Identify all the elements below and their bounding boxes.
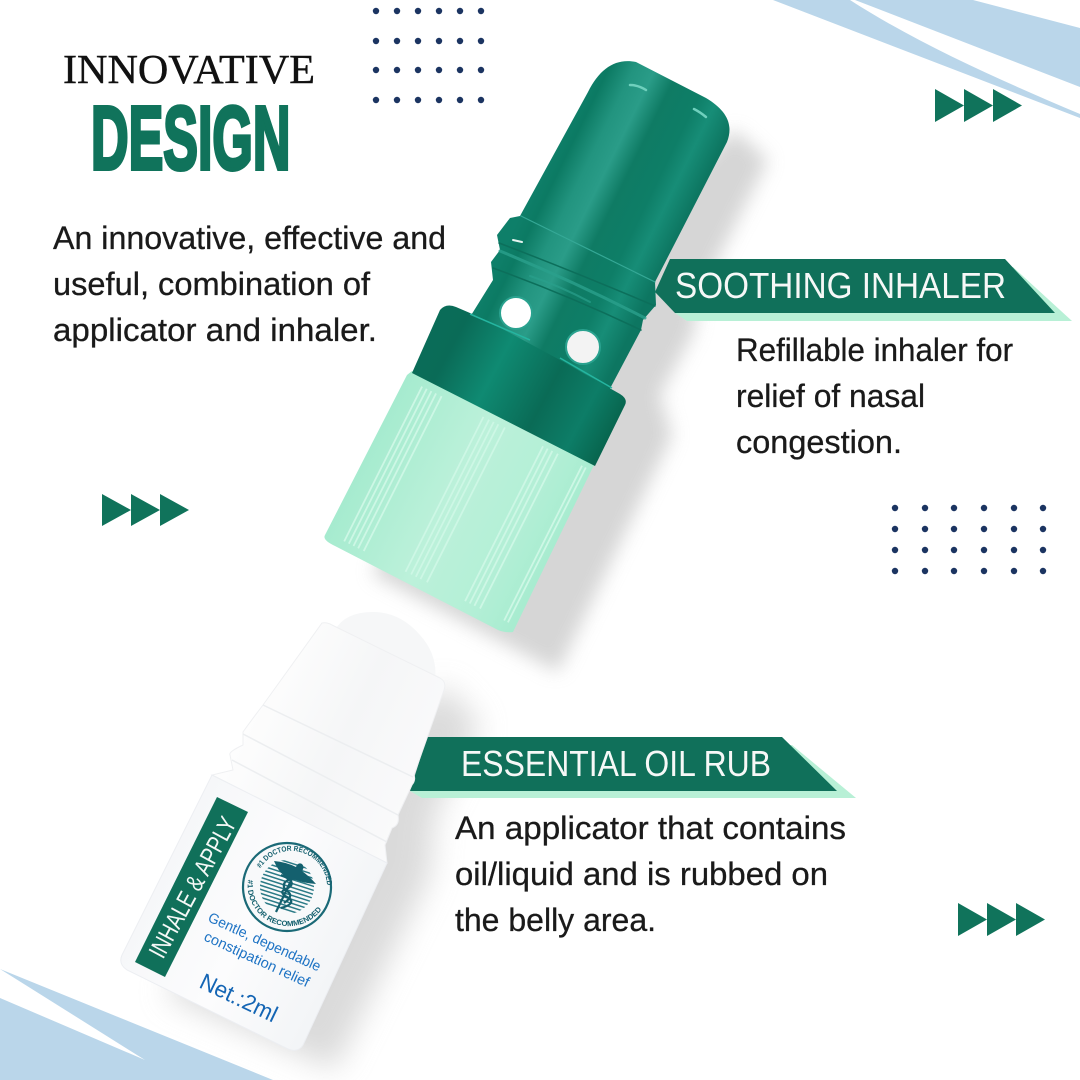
decorative corner: bottom left — [0, 969, 273, 1080]
dot grid: right — [892, 505, 1046, 574]
product: roll-on bottle — [120, 612, 444, 1050]
banner: essential oil rub: ESSENTIAL OIL RUB — [461, 743, 771, 784]
text block: soothing inhaler: relief of nasal — [736, 378, 925, 414]
text block: intro: useful, combination of — [53, 266, 370, 302]
bottle body — [121, 775, 387, 1050]
text block: essential oil rub: the belly area. — [455, 902, 656, 938]
bottle label band: INHALE & APPLY — [144, 812, 243, 963]
product: inhaler — [324, 61, 729, 632]
decorative corner: top right — [773, 0, 1080, 118]
text block: essential oil rub: oil/liquid and is rubbed on — [455, 856, 828, 892]
seal hatch — [260, 860, 314, 913]
banner: essential oil rub — [410, 737, 856, 798]
bottle net volume: Net.:2ml — [196, 968, 282, 1027]
seal bottom text: #1 DOCTOR RECOMMENDED — [248, 880, 320, 926]
inhaler air hole left — [500, 297, 532, 329]
text block: essential oil rub: An applicator that contains — [455, 810, 846, 846]
banner: soothing inhaler — [655, 259, 1072, 321]
text block: soothing inhaler — [736, 332, 1013, 460]
text block: intro: applicator and inhaler. — [53, 312, 377, 348]
arrows: bottom right — [958, 903, 1045, 936]
roller ball — [335, 612, 435, 680]
seal: doctor recommended — [242, 842, 332, 932]
inhaler air hole right — [566, 330, 600, 364]
seal caduceus — [274, 861, 316, 912]
inhaler shadow — [372, 130, 768, 672]
seal top text: #1 DOCTOR RECOMMENDED — [256, 846, 332, 885]
text block: intro — [53, 220, 446, 348]
inhaler mint base — [324, 371, 595, 632]
bottle shadow — [165, 685, 480, 1070]
bottle cap — [212, 623, 445, 863]
text block: soothing inhaler: Refillable inhaler for — [736, 332, 1013, 368]
mint base ribs — [344, 387, 586, 622]
bottle tagline line two: constipation relief — [201, 929, 313, 991]
bottle tagline line one: Gentle, dependable — [205, 910, 323, 975]
collar highlight — [470, 314, 612, 388]
banner: soothing inhaler: SOOTHING INHALER — [675, 265, 1006, 306]
text block: soothing inhaler: congestion. — [736, 424, 902, 460]
inhaler collar — [412, 306, 626, 466]
title: INNOVATIVE — [63, 46, 315, 92]
text block: essential oil rub — [455, 810, 846, 938]
arrows: top right — [935, 89, 1022, 122]
arrows: middle left — [102, 494, 189, 526]
inhaler cap and neck — [465, 61, 729, 398]
inhaler cap highlights — [493, 85, 706, 330]
title — [63, 46, 315, 189]
text block: intro: An innovative, effective and — [53, 220, 446, 256]
bottle label band — [135, 797, 248, 977]
title: DESIGN — [91, 87, 290, 189]
dot grid: top — [373, 8, 484, 103]
cap ridges — [232, 705, 413, 842]
